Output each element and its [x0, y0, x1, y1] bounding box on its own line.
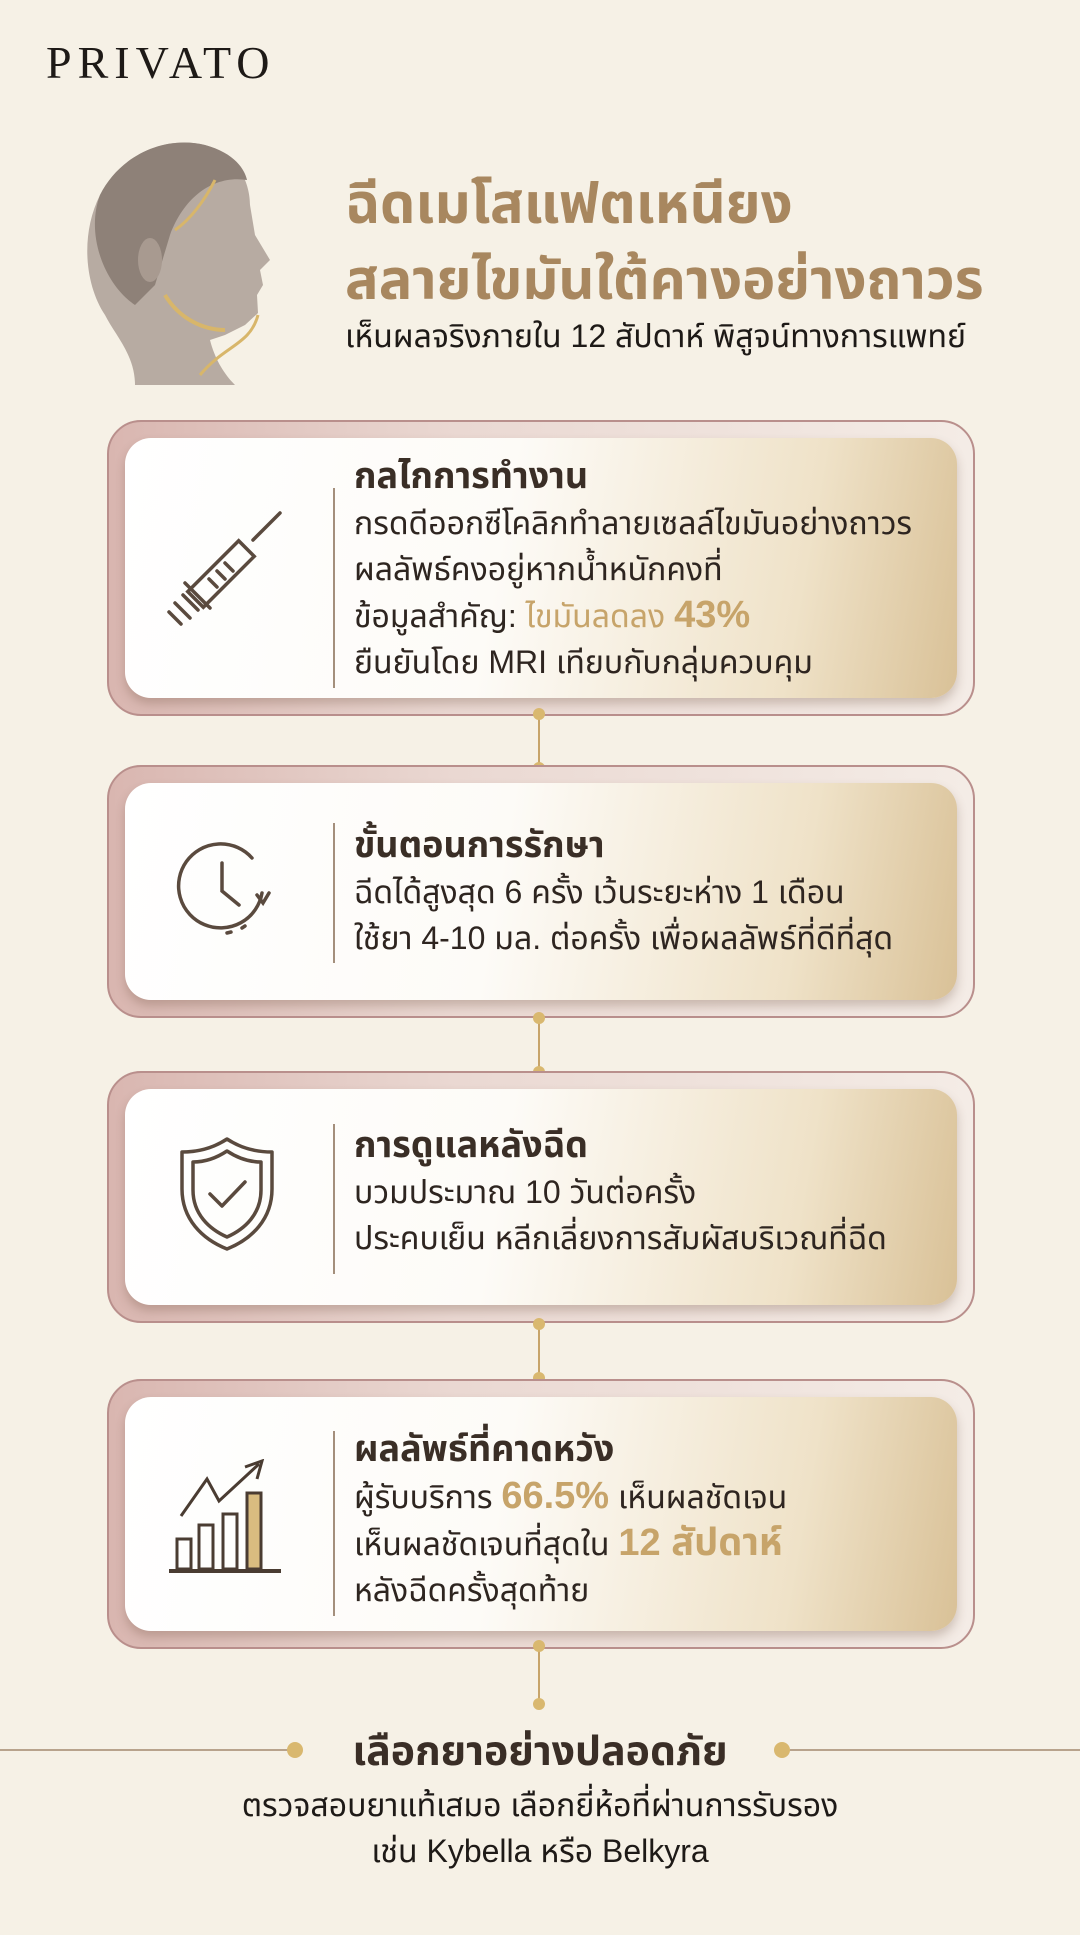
- text: mechanism: [354, 455, 912, 682]
- subtitle: เห็นผลจริงภายใน 12 สัปดาห์ พิสูจน์ทางการแพทย์: [345, 318, 966, 354]
- text: mechanism: ข้อมูลสำคัญ: ไขมันลดลง 43%: [354, 594, 750, 636]
- logo: PRIVATO: [46, 37, 275, 88]
- text: aftercare: [354, 1124, 887, 1256]
- text: safe choice: [242, 1784, 838, 1869]
- text: treatment: ใช้ยา 4-10 มล. ต่อครั้ง เพื่อผลลัพธ์ที่ดีที่สุด: [354, 920, 893, 956]
- panel: aftercare: [107, 1071, 975, 1323]
- text: aftercare: การดูแลหลังฉีด: [354, 1124, 588, 1165]
- connector: [533, 1012, 545, 1071]
- text: mechanism: กรดดีออกซีโคลิกทำลายเซลล์ไขมันอย่างถาวร: [354, 505, 912, 541]
- text: mechanism: กลไกการทำงาน: [354, 455, 588, 496]
- text: treatment: ขั้นตอนการรักษา: [354, 824, 605, 865]
- heading: safe drug choice: เลือกยาอย่างปลอดภัย: [352, 1728, 728, 1774]
- text: results: ผลลัพธ์ที่คาดหวัง: [354, 1428, 614, 1469]
- icon: shield: [180, 1137, 274, 1251]
- icon: syringe: [167, 511, 282, 626]
- text: results: [354, 1424, 787, 1610]
- text: treatment: ฉีดได้สูงสุด 6 ครั้ง เว้นระยะห่าง 1 เดือน: [354, 874, 845, 910]
- text: mechanism: ยืนยันโดย MRI เทียบกับกลุ่มควบคุม: [354, 644, 813, 680]
- text: results: หลังฉีดครั้งสุดท้าย: [354, 1572, 589, 1608]
- divider with dots: [0, 1742, 1080, 1758]
- text: mechanism: ผลลัพธ์คงอยู่หากน้ำหนักคงที่: [354, 551, 723, 587]
- text: results: เห็นผลชัดเจนที่สุดใน 12 สัปดาห์: [354, 1522, 782, 1564]
- connector: [533, 1640, 545, 1710]
- connector: [533, 1318, 545, 1379]
- text: aftercare: บวมประมาณ 10 วันต่อครั้ง: [354, 1174, 696, 1210]
- text: aftercare: ประคบเย็น หลีกเลี่ยงการสัมผัสบริเวณที่ฉีด: [354, 1220, 887, 1256]
- title: สลายไขมันใต้คางอย่างถาวร: [345, 248, 984, 311]
- text: safe choice: ตรวจสอบยาแท้เสมอ เลือกยี่ห้อที่ผ่านการรับรอง: [242, 1787, 838, 1823]
- title: [345, 172, 984, 311]
- panel: treatment steps: [107, 765, 975, 1018]
- panel: mechanism: [107, 420, 975, 716]
- title: ฉีดเมโสแฟตเหนียง: [345, 172, 793, 235]
- icon: clock: [176, 842, 271, 935]
- panel: expected results: [107, 1379, 975, 1649]
- text: treatment: [354, 821, 893, 958]
- icon: bar chart: [169, 1459, 281, 1573]
- text: safe choice: เช่น Kybella หรือ Belkyra: [371, 1833, 709, 1869]
- connector: [533, 708, 545, 765]
- icon: head profile: [87, 142, 270, 385]
- text: results: ผู้รับบริการ 66.5% เห็นผลชัดเจน: [354, 1475, 787, 1517]
